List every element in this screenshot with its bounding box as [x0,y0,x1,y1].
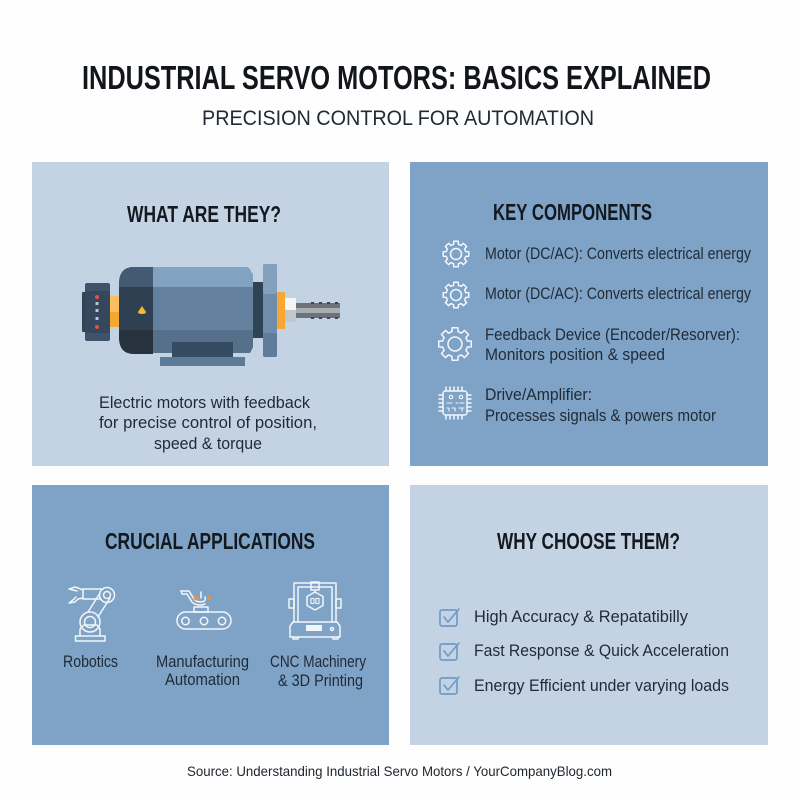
panel: crucial applications [32,485,389,745]
text: manufacturing automation: Manufacturing [156,652,249,671]
text: drive amplifier: Processes signals & powers motor [485,406,716,425]
icon: robot arm [69,587,114,641]
icon: check 1 [440,609,459,626]
heading: key components: KEY COMPONENTS [493,199,652,225]
text: feedback device: Feedback Device (Encoder/Resorver): [485,325,740,344]
text: description: Electric motors with feedback [99,393,310,412]
icon: gear 3 [439,328,471,360]
icon: gear 1 [443,241,469,267]
text: benefit 1: High Accuracy & Repatatibilly [474,607,688,626]
source line: Source: Understanding Industrial Servo Motors / YourCompanyBlog.com [187,763,612,779]
heading: why choose them: WHY CHOOSE THEM? [497,528,680,554]
text: description [99,393,317,453]
text: motor 2: Motor (DC/AC): Converts electrical energy [485,284,751,303]
text: feedback device [485,325,740,364]
text: benefit 3: Energy Efficient under varying loads [474,676,729,695]
panel: what are they [32,162,389,466]
icon: circuit chip [439,387,471,419]
text: cnc machinery and 3d printing [270,652,366,690]
text: motor 1: Motor (DC/AC): Converts electrical energy [485,244,751,263]
text: drive amplifier: Drive/Amplifier: [485,385,592,404]
text: cnc machinery and 3d printing: & 3D Printing [278,671,363,690]
text: benefit 2: Fast Response & Quick Acceleration [474,641,729,660]
icon: check 2 [440,643,459,660]
text: drive amplifier [485,385,716,425]
text: manufacturing automation: Automation [165,670,240,689]
subtitle: PRECISION CONTROL FOR AUTOMATION [202,107,594,130]
icon: check 3 [440,677,459,694]
text: manufacturing automation [156,652,249,689]
text: robotics: Robotics [63,652,118,671]
text: cnc machinery and 3d printing: CNC Machinery [270,652,366,671]
icon: servo motor [82,264,340,366]
text: description: for precise control of position, [99,413,317,432]
panel: why choose them [410,485,768,745]
panel: key components [410,162,768,466]
heading: what are they: WHAT ARE THEY? [127,201,281,227]
icon: 3D printer [289,582,341,639]
icon: gear 2 [443,282,469,308]
text: feedback device: Monitors position & speed [485,345,665,364]
icon: conveyor automation [177,591,231,629]
text: description: speed & torque [154,434,262,453]
heading: crucial applications: CRUCIAL APPLICATIONS [105,528,315,554]
